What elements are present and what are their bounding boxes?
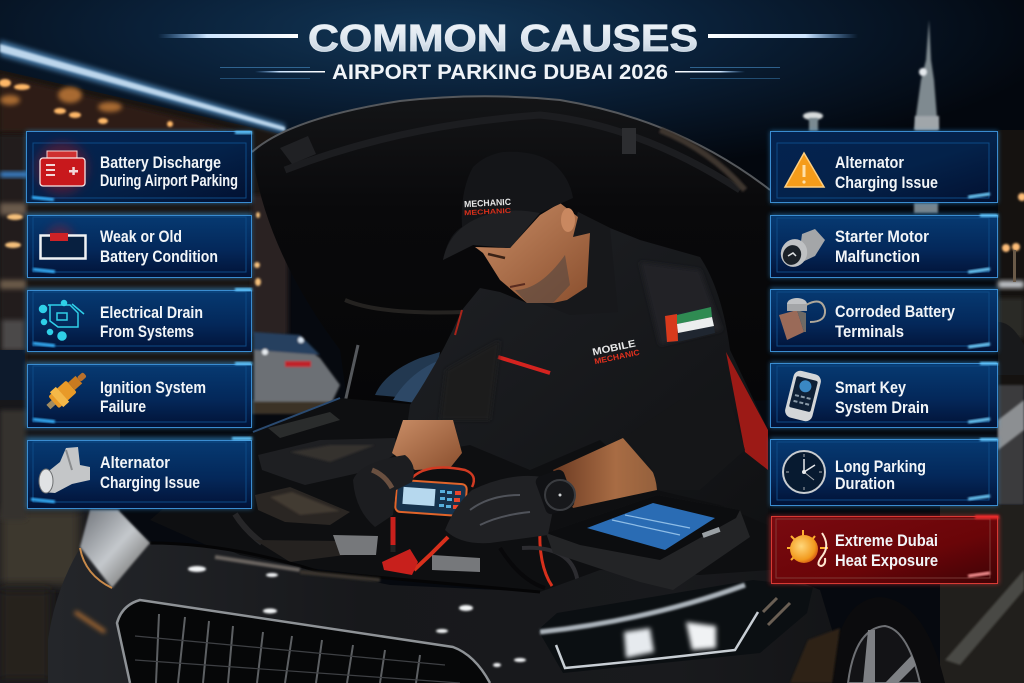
panel text: Smart Key [835, 379, 907, 397]
panel text [835, 532, 938, 570]
parked silver car [254, 332, 340, 402]
panel text: Battery Condition [100, 248, 218, 266]
mechanic [353, 152, 768, 590]
ground and parked cars [0, 322, 1024, 683]
panel text [100, 454, 200, 492]
icon: smart key fob [784, 369, 822, 423]
panel text [100, 379, 206, 416]
panel text: Charging Issue [100, 474, 200, 492]
panel text: Failure [100, 398, 146, 416]
roof light streak [0, 40, 285, 134]
chest logo: MOBILE [591, 338, 637, 358]
car front body [48, 510, 945, 683]
gloves [353, 455, 553, 543]
panel text [100, 304, 203, 341]
panel text: System Drain [835, 399, 929, 417]
hood highlights [188, 566, 526, 667]
right headlight [538, 580, 813, 673]
panel text: Electrical Drain [100, 304, 203, 322]
panel text [835, 154, 938, 192]
icon: starter motor [776, 229, 825, 271]
icon: weak battery outline [40, 225, 86, 258]
panel: Smart Key System Drain [770, 362, 998, 428]
panel: Alternator Charging Issue (left) [26, 437, 252, 509]
panel: Starter Motor Malfunction [770, 214, 998, 278]
title heading: COMMON CAUSES [308, 18, 698, 60]
panel text: From Systems [100, 323, 194, 341]
icon: clock [783, 451, 825, 493]
panel text [835, 303, 956, 341]
icon: corroded terminals [779, 298, 825, 340]
tablet [546, 495, 750, 590]
panel: Alternator Charging Issue (right) [770, 131, 998, 203]
cap: MECHANIC [464, 197, 512, 209]
neck and face [475, 203, 590, 303]
panel text [835, 228, 930, 266]
panel text [835, 458, 926, 493]
open car hood [252, 96, 770, 420]
icon: alternator [39, 447, 90, 493]
panel text: Starter Motor [835, 228, 930, 246]
subtitle: AIRPORT PARKING DUBAI 2026 [332, 61, 668, 84]
icon: spark plug [42, 367, 91, 414]
panel text: Charging Issue [835, 174, 938, 192]
panel text: Long Parking [835, 458, 926, 476]
icon: electrical circuit [40, 300, 84, 340]
panel: Ignition System Failure [26, 362, 252, 428]
panel: Battery Discharge During Airport Parking [26, 131, 252, 203]
panel text: Heat Exposure [835, 552, 938, 570]
shirt and torso [408, 212, 768, 525]
panel text: Duration [835, 475, 895, 493]
panel: Weak or Old Battery Condition [26, 213, 252, 278]
panel text [100, 154, 238, 190]
right skyline with tower [803, 20, 1024, 390]
engine bay [150, 398, 770, 595]
panel: Corroded Battery Terminals [770, 288, 998, 352]
icon: red car battery [36, 142, 88, 194]
UAE flag patch [664, 307, 715, 342]
panel text: Ignition System [100, 379, 206, 397]
cap [443, 152, 573, 260]
title accent lines [158, 34, 858, 79]
panel text: Battery Discharge [100, 154, 221, 172]
left headlight [80, 510, 150, 588]
icon: blazing sun [787, 530, 828, 566]
left terminal building [0, 40, 288, 400]
cap: MECHANIC [464, 208, 511, 217]
panel text: Weak or Old [100, 228, 182, 246]
panel text: During Airport Parking [100, 172, 238, 190]
wristwatch [534, 468, 576, 516]
left forearm [392, 420, 462, 470]
panel: Extreme Dubai Heat Exposure [770, 515, 999, 584]
right arm and sleeve [553, 400, 745, 508]
chest logo: MECHANIC [594, 348, 641, 366]
panel text: Terminals [835, 323, 904, 341]
engine cover [258, 438, 398, 485]
icon: warning triangle [785, 153, 824, 187]
panel text: Alternator [100, 454, 171, 472]
title block [158, 18, 858, 84]
panel text [100, 228, 218, 266]
people in terminal [2, 320, 24, 350]
front wheel [790, 597, 945, 683]
panel: Electrical Drain From Systems [26, 288, 252, 352]
panel text [835, 379, 929, 417]
panel text: Alternator [835, 154, 905, 172]
panel text: Extreme Dubai [835, 532, 938, 550]
radiator grille [117, 600, 490, 683]
chest logo [591, 338, 641, 366]
panel text: Corroded Battery [835, 303, 956, 321]
panel text: Malfunction [835, 248, 920, 266]
panel: Long Parking Duration [770, 438, 998, 506]
multimeter tester with leads [382, 468, 474, 575]
